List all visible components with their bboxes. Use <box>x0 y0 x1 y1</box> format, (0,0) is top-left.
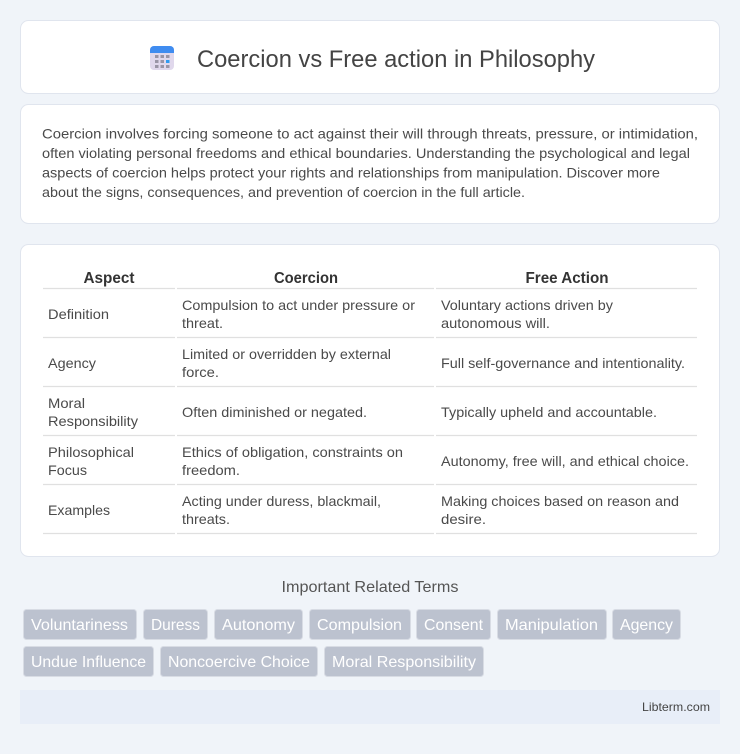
text block: intro: Coercion involves forcing someone to act against their will through threats, pressure, or intimidation, <box>42 126 698 142</box>
table row: Philosophical Focus: Ethics of obligation, constraints on <box>182 444 403 460</box>
text block: intro: aspects of coercion helps protect your rights and relationships from manipulation. Discover more <box>42 164 660 180</box>
footer credit: Libterm.com <box>642 700 710 714</box>
table row: Moral Responsibility: Typically upheld and accountable. <box>441 404 657 420</box>
tags: related terms: Noncoercive Choice <box>168 654 310 671</box>
text block: intro: often violating personal freedoms and ethical boundaries. Understanding the psychological and legal <box>42 145 690 161</box>
table row: Moral Responsibility: Responsibility <box>48 413 138 429</box>
tags: related terms: Compulsion <box>317 617 402 634</box>
table row: Philosophical Focus: Focus <box>48 462 87 478</box>
table row: Philosophical Focus: Autonomy, free will, and ethical choice. <box>441 453 689 469</box>
tags: related terms: Agency <box>620 617 673 634</box>
table row: Moral Responsibility: Often diminished or negated. <box>182 404 367 420</box>
table row: Examples: Acting under duress, blackmail, <box>182 493 381 509</box>
table row: Definition: threat. <box>182 315 223 331</box>
heading: related terms: Important Related Terms <box>282 579 458 596</box>
table header <box>84 270 608 287</box>
tags: related terms: Moral Responsibility <box>332 654 476 671</box>
tags: related terms: Undue Influence <box>31 654 146 671</box>
panel: title header <box>20 20 720 94</box>
table header: Free Action <box>526 270 608 287</box>
text block: intro <box>42 126 698 200</box>
table row: Examples: desire. <box>441 511 486 527</box>
table header: Aspect <box>84 270 135 287</box>
tags: related terms: Voluntariness <box>31 617 128 634</box>
text block: intro: about the signs, consequences, and prevention of coercion in the full article. <box>42 184 525 200</box>
table row: Examples: threats. <box>182 511 230 527</box>
table row: Definition <box>48 297 613 331</box>
icon: calendar <box>150 46 174 70</box>
table row: Definition: Compulsion to act under pressure or <box>182 297 415 313</box>
tags: related terms: Autonomy <box>222 617 295 634</box>
tags: related terms: Manipulation <box>505 617 598 634</box>
table header: Coercion <box>274 270 338 287</box>
table row: Definition: autonomous will. <box>441 315 550 331</box>
tags: related terms: Duress <box>151 617 200 634</box>
table row: Moral Responsibility: Moral <box>48 395 85 411</box>
table row: Agency <box>48 346 685 380</box>
table row: Philosophical Focus: Philosophical <box>48 444 134 460</box>
table row: Moral Responsibility <box>48 395 657 429</box>
panel: comparison table <box>20 244 720 556</box>
table row: Examples <box>48 493 679 527</box>
table row: Agency: Full self-governance and intentionality. <box>441 355 685 371</box>
table row: Agency: Agency <box>48 355 96 371</box>
table row: Definition: Voluntary actions driven by <box>441 297 613 313</box>
panel: intro paragraph <box>20 104 720 224</box>
title: Coercion vs Free action in Philosophy <box>197 46 595 73</box>
table row: Philosophical Focus: freedom. <box>182 462 240 478</box>
table row: Philosophical Focus <box>48 444 689 478</box>
table row: Definition: Definition <box>48 306 109 322</box>
footer bar <box>20 690 720 724</box>
tags: related terms <box>24 610 680 676</box>
tags: related terms: Consent <box>424 617 484 634</box>
table row: Examples: Making choices based on reason and <box>441 493 679 509</box>
table row: Agency: Limited or overridden by external <box>182 346 391 362</box>
table row: Agency: force. <box>182 364 219 380</box>
table row: Examples: Examples <box>48 502 110 518</box>
